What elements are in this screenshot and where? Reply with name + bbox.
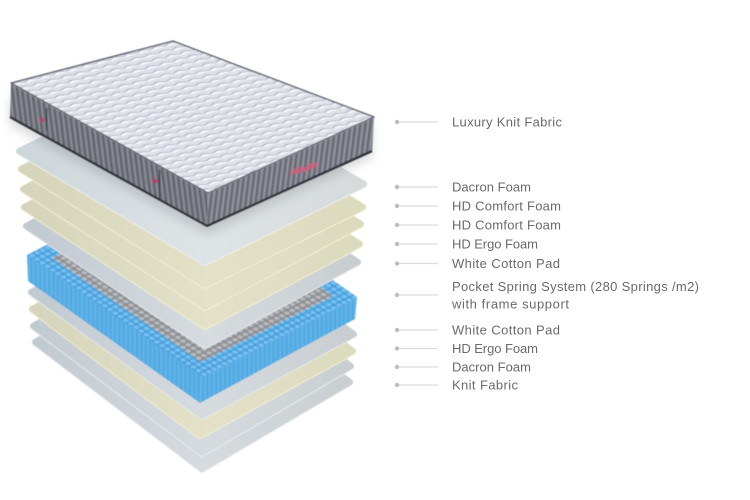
labels column [395, 114, 699, 392]
label: White Cotton Pad lower [395, 322, 560, 338]
label: HD Ergo Foam [395, 236, 538, 252]
layer: lower white cotton pad [31, 210, 354, 417]
label: White Cotton Pad lower: White Cotton Pad [452, 322, 560, 338]
label: HD Ergo Foam: HD Ergo Foam [452, 236, 538, 252]
label: HD Comfort Foam [395, 198, 561, 214]
label: Dacron Foam [395, 180, 531, 194]
layer: HD ergo foam [24, 125, 360, 327]
label: Luxury Knit Fabric [395, 114, 562, 130]
label: Dacron Foam: Dacron Foam [452, 180, 531, 194]
label: Dacron Foam lower: Dacron Foam [452, 360, 531, 374]
label: Pocket Spring System [395, 279, 699, 312]
label: HD Ergo Foam lower: HD Ergo Foam [452, 341, 538, 356]
pocket spring system [27, 175, 357, 403]
layer: bottom knit fabric [35, 255, 350, 470]
layer: HD comfort foam 1 [21, 91, 363, 286]
label: White Cotton Pad [395, 256, 560, 271]
label: White Cotton Pad: White Cotton Pad [452, 256, 560, 271]
mattress pink logo [290, 162, 317, 175]
label: HD Comfort Foam second: HD Comfort Foam [452, 218, 561, 232]
mattress left side [10, 84, 208, 227]
mattress layer stack [10, 41, 374, 470]
label: Luxury Knit Fabric: Luxury Knit Fabric [452, 114, 562, 130]
label: Knit Fabric: Knit Fabric [452, 378, 518, 392]
layer: upper dacron foam [19, 73, 364, 263]
mattress base piping [10, 117, 372, 226]
label: Knit Fabric [395, 378, 518, 392]
spring side left [27, 255, 202, 403]
label: HD Comfort Foam second [395, 218, 561, 232]
mattress right side [207, 118, 374, 227]
layer: HD comfort foam 2 [23, 106, 361, 308]
layer: upper white cotton pad [26, 143, 358, 346]
label: Dacron Foam lower [395, 360, 531, 374]
spring inner coils [52, 190, 333, 362]
label: HD Comfort Foam: HD Comfort Foam [452, 198, 561, 214]
spring side right [200, 297, 357, 403]
label: Pocket Spring System: with frame support [451, 296, 569, 312]
luxury knit fabric mattress [10, 41, 374, 227]
mattress pink tags [40, 108, 160, 200]
mattress quilted top [11, 41, 374, 193]
label: HD Ergo Foam lower [395, 341, 538, 356]
layer: lower dacron foam [33, 239, 351, 454]
mattress shadow [10, 95, 372, 235]
layer: lower HD ergo foam [32, 225, 353, 436]
spring top frame [27, 175, 357, 377]
label: Pocket Spring System: Pocket Spring System (280 Springs /m2) [452, 279, 699, 294]
